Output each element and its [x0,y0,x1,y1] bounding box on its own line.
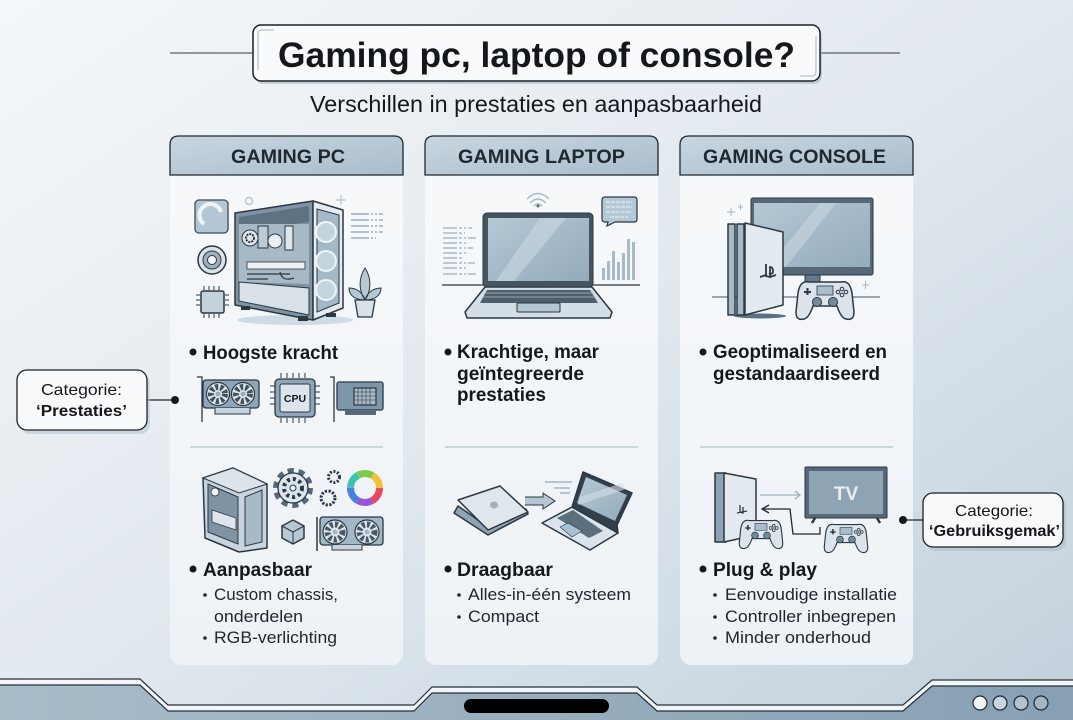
callout: categorie prestaties [17,370,179,434]
title banner [170,25,900,84]
icon: controller [796,282,854,319]
icon: large gear [276,471,310,505]
pill button [464,699,609,713]
text block: draagbaar [444,560,631,626]
icon: playstation mark [760,264,776,277]
callout: categorie gebruiksgemak: Categorie: [955,503,1033,520]
icon: cpu chip: CPU [284,393,306,405]
callout: categorie prestaties: Categorie: [41,382,122,399]
panel: gaming pc [170,136,403,665]
icon: plant [349,268,381,317]
title text: Gaming pc, laptop of console? [278,36,795,75]
divider [445,446,638,448]
text block: draagbaar: Alles-in-één systeem [468,585,631,604]
icon: cpu chip [270,373,320,423]
text block: aanpasbaar: Aanpasbaar [203,560,313,581]
icon: tv [805,467,887,523]
text block: draagbaar: Compact [468,607,539,626]
performance text: geoptimaliseerd en gestandaardiseerd [700,342,887,385]
arrow: console to tv [760,491,800,499]
icon: pc tower with components [195,195,383,325]
column header: gaming laptop: GAMING LAPTOP [458,147,625,168]
icon: custom chassis, gears, rgb ring, gpu [203,468,383,552]
arrow: tv to console [762,505,820,534]
panel: gaming laptop [425,136,658,665]
text block: plug and play: Controller inbegrepen [725,607,896,626]
icon: expansion card [330,377,383,422]
text block: draagbaar: Draagbaar [457,560,554,581]
icon: speech bubble [602,197,637,226]
text block: aanpasbaar [190,560,338,647]
icon: tv: TV [834,484,858,505]
arrow [525,493,555,509]
text block: plug and play [700,560,897,647]
callout: categorie prestaties: ‘Prestaties’ [36,403,127,420]
icon: console connected to tv [715,467,887,553]
icon: wifi [527,194,549,208]
performance text: geoptimaliseerd en gestandaardiseerd: gestandaardiseerd [713,364,880,385]
text block: aanpasbaar: onderdelen [214,607,303,626]
performance text: krachtige, maar geintegreerde prestaties: geïntegreerde [457,364,584,385]
page indicator dots [973,696,1048,710]
column header: gaming laptop [425,136,658,175]
column header: gaming pc: GAMING PC [231,147,345,168]
performance text: krachtige, maar geintegreerde prestaties: prestaties [457,385,546,406]
divider [190,446,383,448]
text block: aanpasbaar: Custom chassis, [214,585,338,604]
divider [700,446,893,448]
subtitle: Verschillen in prestaties en aanpasbaarheid [310,91,762,117]
callout: categorie gebruiksgemak [899,493,1066,551]
text block: aanpasbaar: RGB-verlichting [214,628,337,647]
icon: graphics card [197,377,259,422]
panel: gaming console [680,136,913,665]
performance text: hoogste kracht: Hoogste kracht [203,343,339,364]
icon: closed laptop to open laptop [454,472,632,550]
performance text: krachtige, maar geintegreerde prestaties [444,342,600,406]
column header: gaming console: GAMING CONSOLE [703,147,886,168]
text block: plug and play: Eenvoudige installatie [725,585,897,604]
bottom device frame [0,679,1073,720]
icon: rgb ring [350,474,380,502]
performance text: krachtige, maar geintegreerde prestaties: Krachtige, maar [457,342,600,363]
performance text: geoptimaliseerd en gestandaardiseerd: Geoptimaliseerd en [713,342,887,363]
callout: categorie gebruiksgemak: ‘Gebruiksgemak’ [929,523,1060,540]
icon: laptop with wifi and charts [442,194,640,318]
text block: plug and play: Plug & play [713,560,817,581]
text block: plug and play: Minder onderhoud [725,628,871,647]
column header: gaming pc [170,136,403,175]
icon: console with monitor and controller [712,198,880,319]
column header: gaming console [680,136,913,175]
icon: bar chart [602,239,635,280]
